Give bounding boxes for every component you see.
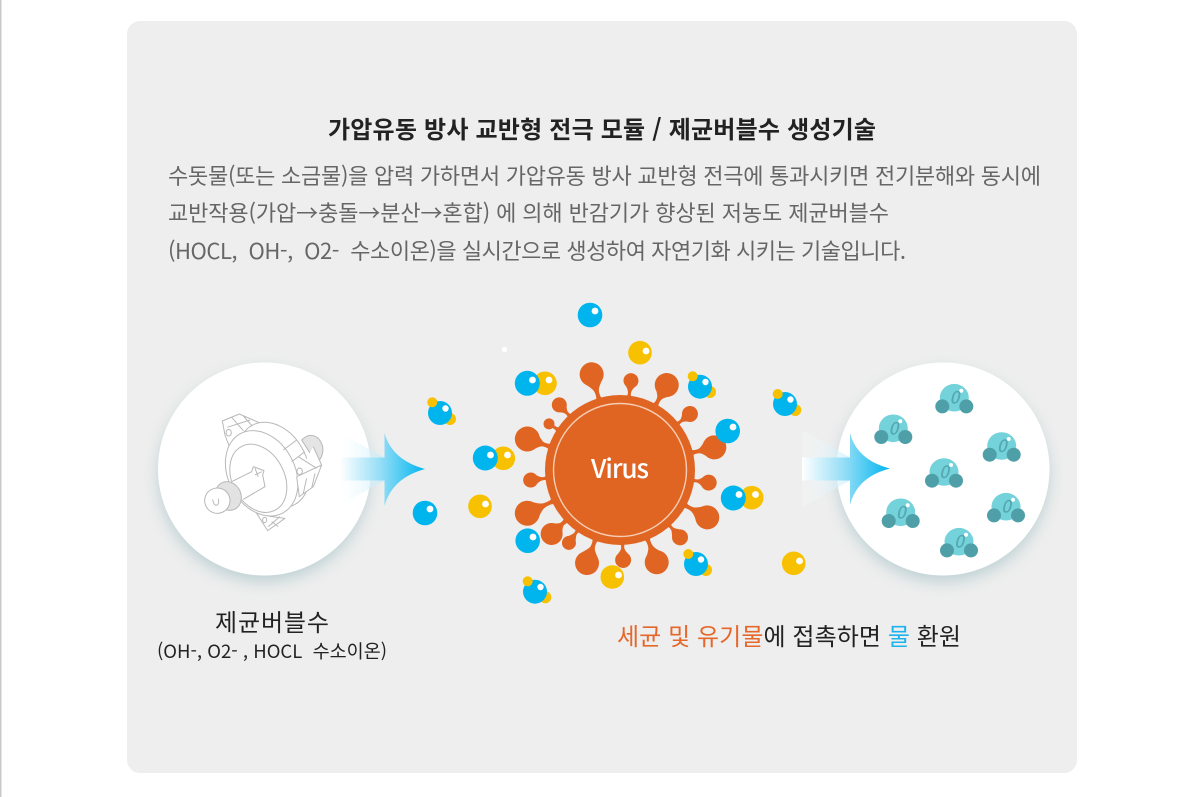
caption: ion list: (OH-, O2- , HOCL 수소이온) xyxy=(157,638,387,664)
ion triplet xyxy=(683,549,712,576)
ion triplet xyxy=(688,371,716,399)
blue ion xyxy=(578,303,602,327)
water molecule: 0 xyxy=(896,498,908,523)
ion triplet xyxy=(427,397,456,425)
water molecule: 0 xyxy=(939,458,951,483)
virus spikes xyxy=(511,359,729,578)
yellow ion xyxy=(468,494,492,518)
water molecule xyxy=(925,458,963,488)
ion pair xyxy=(473,446,515,470)
water molecule: 0 xyxy=(1001,493,1013,518)
ion triplet xyxy=(523,576,551,604)
yellow ion xyxy=(600,565,624,589)
water molecule xyxy=(983,432,1021,462)
water molecule xyxy=(940,528,978,557)
panel: background card xyxy=(127,21,1077,773)
yellow ion xyxy=(628,341,652,365)
blue ion xyxy=(715,419,740,443)
water molecule: 0 xyxy=(954,528,966,553)
description text block xyxy=(168,159,1041,266)
water molecule: 0 xyxy=(949,384,961,409)
water molecule: 0 xyxy=(888,414,900,439)
white sparkle xyxy=(502,347,507,352)
virus illustration xyxy=(511,359,729,578)
caption: bubble water: 제균버블수 xyxy=(215,603,329,638)
water molecule: 0 xyxy=(997,432,1009,457)
panel: right circle with water molecules xyxy=(836,362,1050,581)
description text block: (HOCL, OH-, O2- 수소이온)을 실시간으로 생성하여 자연기화 시키는 기술입니다. xyxy=(168,234,906,266)
yellow ion xyxy=(782,552,806,575)
virus body xyxy=(545,395,695,545)
ion pair xyxy=(515,371,557,396)
blue ion xyxy=(413,501,437,525)
water molecule xyxy=(987,493,1025,522)
title: 가압유동 방사 교반형 전극 모듈 / 제균버블수 생성기술 xyxy=(328,110,876,145)
arrow: right xyxy=(802,430,890,507)
page left edge line xyxy=(0,0,2,797)
panel: left circle with electrode module xyxy=(158,362,371,581)
icon: electrode module line drawing xyxy=(200,410,324,531)
water molecule xyxy=(882,498,920,528)
arrow: left xyxy=(340,433,425,506)
blue ion xyxy=(515,528,540,553)
ion pair xyxy=(721,486,764,510)
water molecule xyxy=(874,414,912,444)
ion triplet xyxy=(773,389,801,416)
water molecule xyxy=(935,384,973,413)
description text block: 교반작용(가압→충돌→분산→혼합) 에 의해 반감기가 향상된 저농도 제균버블수 xyxy=(168,196,889,228)
blue and yellow ions xyxy=(413,303,806,604)
caption: restored to water: 세균 및 유기물에 접촉하면 물 환원 xyxy=(617,617,961,652)
description text block: 수돗물(또는 소금물)을 압력 가하면서 가압유동 방사 교반형 전극에 통과시키면 전기분해와 동시에 xyxy=(168,159,1041,191)
virus label: Virus xyxy=(590,449,649,486)
